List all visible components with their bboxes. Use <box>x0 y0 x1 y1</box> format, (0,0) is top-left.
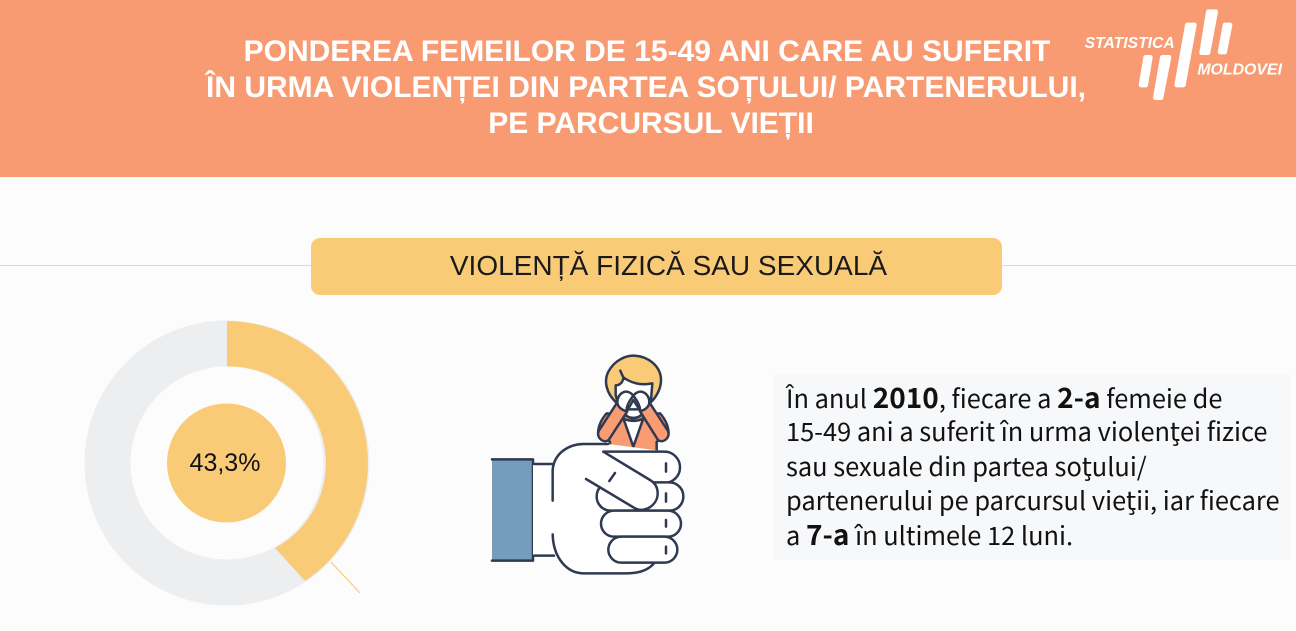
fingers <box>603 452 680 483</box>
logo: Statistica Moldovei: STATISTICA <box>1085 35 1175 52</box>
text panel: a 7-a în ultimele 12 luni. <box>786 514 1073 554</box>
woman's arms <box>598 403 627 441</box>
text panel <box>773 374 1291 560</box>
woman's hair <box>606 356 661 402</box>
logo: Statistica Moldovei: MOLDOVEI <box>1197 61 1283 78</box>
woman's body <box>598 413 669 453</box>
thumb <box>586 452 658 510</box>
logo: Statistica Moldovei <box>1084 9 1283 100</box>
title <box>204 35 1086 140</box>
text panel: 15-49 ani a suferit în urma violenţei fizice <box>786 413 1267 449</box>
text panel: În anul 2010, fiecare a 2-a femeie de <box>786 377 1222 417</box>
donut chart: 43,3%: 43,3% <box>190 449 260 477</box>
knuckle marks <box>609 463 666 553</box>
section heading badge <box>311 238 1002 295</box>
woman's hands <box>617 392 633 411</box>
donut chart: 43,3% <box>84 320 370 606</box>
text panel: partenerului pe parcursul vieţii, iar fiecare <box>786 482 1280 518</box>
text panel: sau sexuale din partea soţului/ <box>786 448 1147 484</box>
illustration: fist holding a woman <box>490 354 685 575</box>
title: ÎN URMA VIOLENȚEI DIN PARTEA SOȚULUI/ PARTENERULUI, <box>206 71 1086 104</box>
title: PONDEREA FEMEILOR DE 15-49 ANI CARE AU SUFERIT <box>244 35 1050 68</box>
sleeve <box>492 459 533 561</box>
section heading badge: VIOLENȚĂ FIZICĂ SAU SEXUALĂ <box>450 250 887 281</box>
title: PE PARCURSUL VIEȚII <box>488 107 814 140</box>
header band <box>0 0 1296 177</box>
woman's face <box>616 377 652 418</box>
wrist <box>533 464 554 556</box>
palm <box>553 444 667 573</box>
